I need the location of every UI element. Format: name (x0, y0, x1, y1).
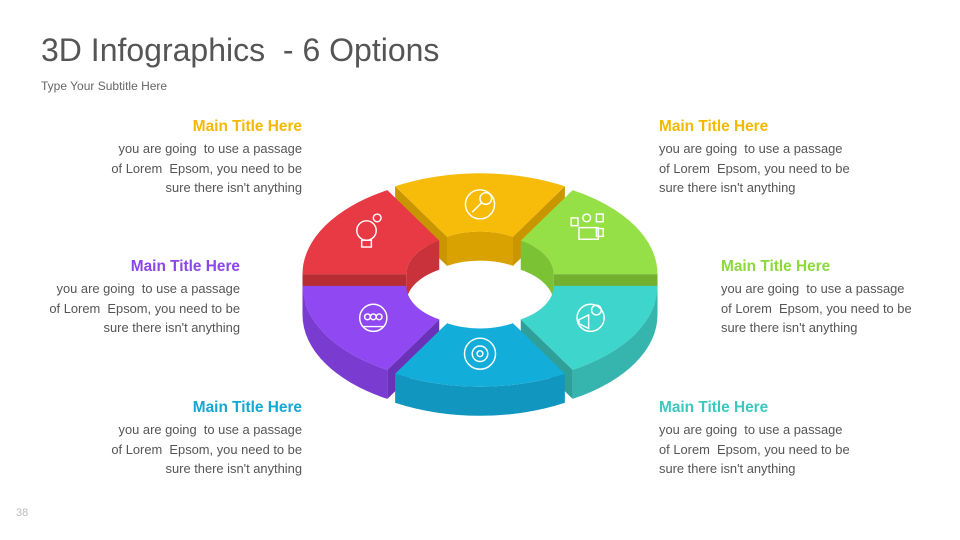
icon: megaphone like (577, 304, 604, 331)
segment: blue (395, 323, 565, 416)
text block: middle right: you are going to use a passage (721, 281, 904, 296)
icon: team gear (360, 304, 387, 331)
text block: top right: sure there isn't anything (659, 180, 795, 195)
text block: bottom right (659, 399, 850, 476)
text block: bottom right: sure there isn't anything (659, 461, 795, 476)
text block: top left (111, 118, 302, 195)
segment: red (302, 190, 439, 303)
text block: top left: of Lorem Epsom, you need to be (111, 160, 302, 176)
text block: middle left: Main Title Here (131, 258, 240, 275)
text block: bottom right: of Lorem Epsom, you need to be (659, 442, 850, 456)
text block: middle left: you are going to use a passage (57, 281, 240, 296)
page number: 38 (16, 507, 28, 519)
text block: middle left: sure there isn't anything (104, 320, 240, 335)
segment: purple (302, 286, 439, 399)
icon: target search (465, 190, 495, 219)
text block: middle left (49, 258, 240, 335)
segment: teal (521, 286, 658, 399)
text block: top left: sure there isn't anything (166, 180, 302, 195)
segment: green (521, 190, 658, 303)
text block: middle left: of Lorem Epsom, you need to be (49, 300, 240, 316)
text block: bottom right: you are going to use a passage (659, 422, 842, 437)
text block: top right: of Lorem Epsom, you need to be (659, 160, 850, 176)
text block: middle right: of Lorem Epsom, you need to be (721, 300, 912, 316)
text block: bottom left: sure there isn't anything (166, 461, 302, 476)
text block: bottom right: Main Title Here (659, 399, 768, 416)
text block: bottom left: of Lorem Epsom, you need to be (111, 442, 302, 456)
icon: gear cycle (464, 338, 496, 369)
icon: social marketing (571, 214, 603, 239)
text block: top right (659, 118, 850, 195)
title: 3D Infographics - 6 Options (41, 32, 439, 68)
text block: middle right: sure there isn't anything (721, 320, 857, 335)
text block: bottom left (111, 399, 302, 476)
segment: yellow (395, 173, 565, 266)
text block: top right: Main Title Here (659, 118, 768, 135)
icon: light bulb (357, 214, 381, 247)
text block: top right: you are going to use a passage (659, 141, 842, 156)
text block: bottom left: Main Title Here (193, 399, 302, 416)
text block: middle right: Main Title Here (721, 258, 830, 275)
text block: top left: Main Title Here (193, 118, 302, 135)
text block: middle right (721, 258, 912, 335)
text block: top left: you are going to use a passage (119, 141, 302, 156)
text block: bottom left: you are going to use a passage (119, 422, 302, 437)
subtitle: Type Your Subtitle Here (41, 79, 167, 93)
